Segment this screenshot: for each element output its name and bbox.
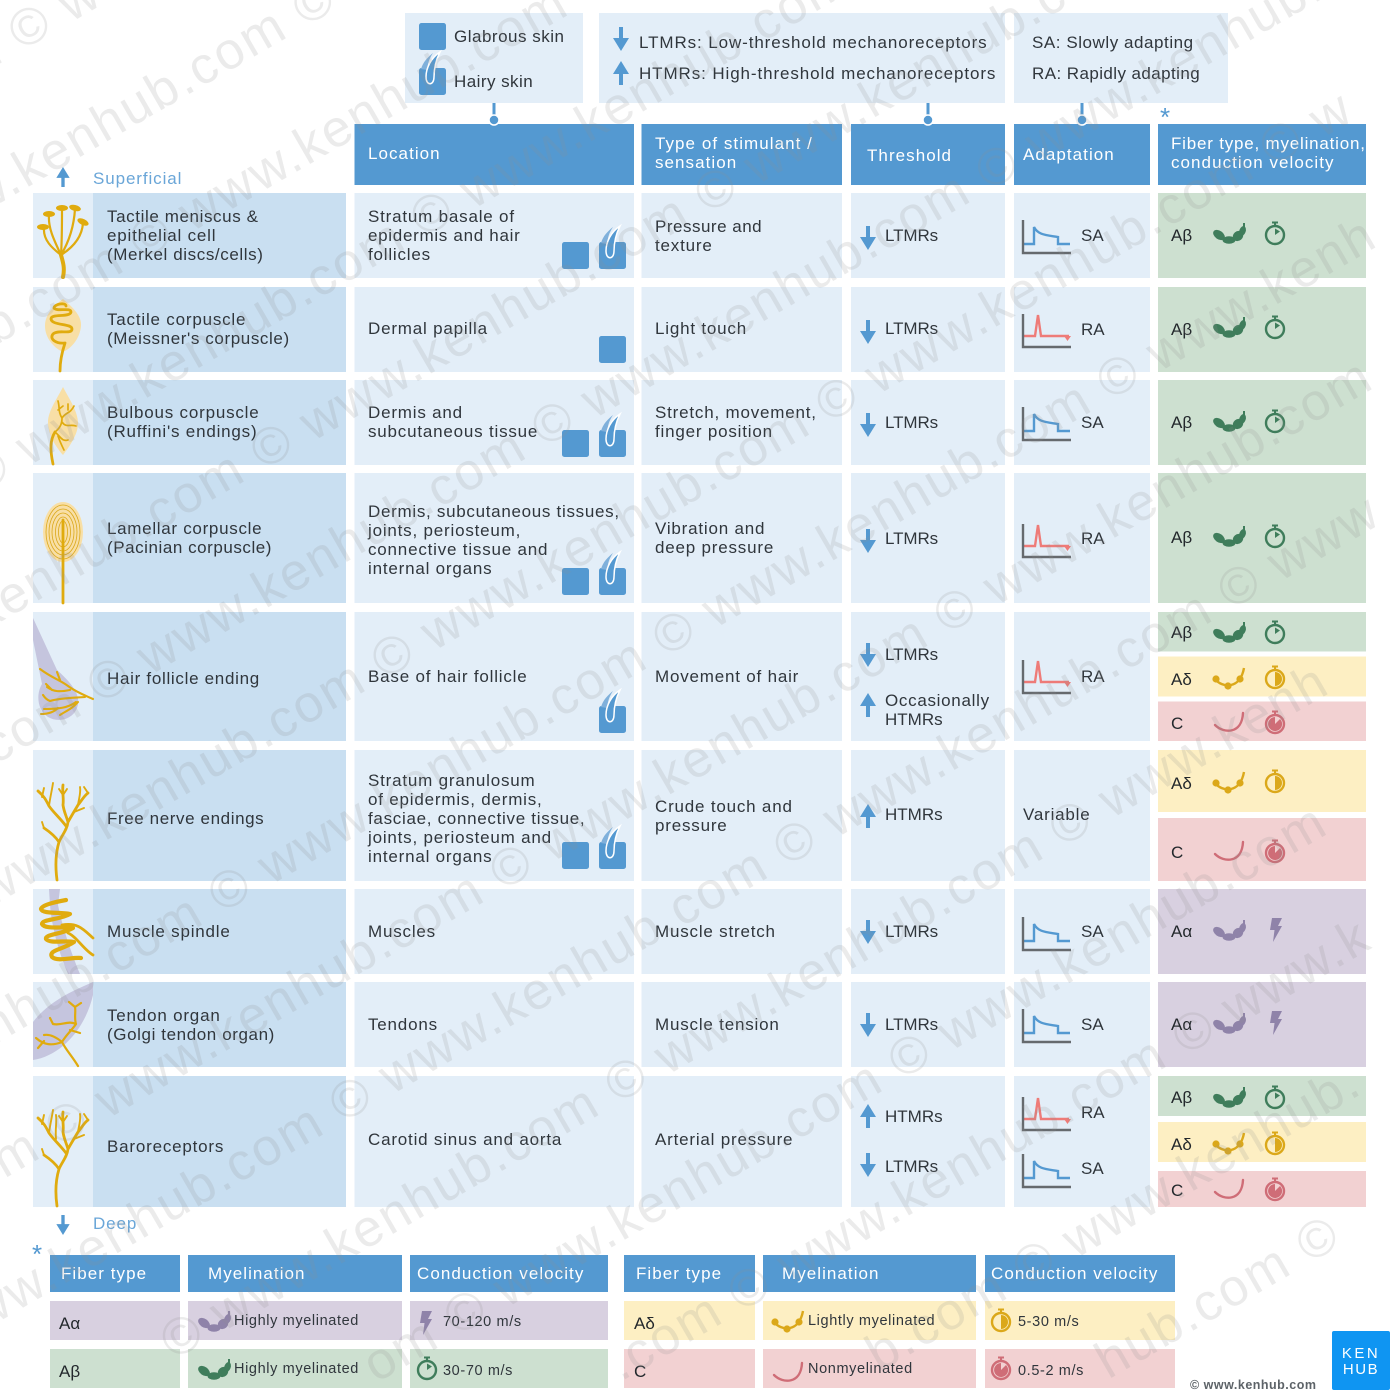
key row: A-alpha: Aα — [59, 1314, 80, 1333]
panel: fiber A-alpha — [1158, 889, 1366, 974]
key table: A-delta and C — [624, 1255, 1175, 1388]
panel: location — [354, 889, 634, 974]
panel: adaptation — [1014, 982, 1150, 1067]
receptor name: Free nerve endings — [107, 809, 264, 828]
legend label: LTMRs: LTMRs: Low-threshold mechanoreceptors — [639, 33, 988, 52]
panel: adaptation — [1014, 287, 1150, 372]
connector: threshold legend to threshold — [923, 103, 933, 125]
icon: hair follicle ending — [33, 618, 93, 720]
panel: location: Carotid sinus and aorta — [368, 1130, 562, 1149]
icon: muscle spindle — [41, 889, 93, 974]
panel: location: connective tissue and — [368, 540, 548, 559]
row: Baroreceptors — [33, 1076, 1366, 1207]
panel: stimulant — [642, 1076, 842, 1207]
panel: location: fasciae, connective tissue, — [368, 809, 585, 828]
panel: stimulant: Arterial pressure — [655, 1130, 793, 1149]
copyright: © www.kenhub.com — [1190, 1378, 1316, 1392]
panel: adaptation: SA — [1081, 226, 1104, 245]
key header: fiber type — [624, 1255, 755, 1292]
panel: adaptation — [1014, 889, 1150, 974]
key row: A-beta — [50, 1349, 608, 1388]
panel: adaptation: SA — [1081, 1159, 1104, 1178]
panel: fiber A-alpha — [1158, 982, 1366, 1067]
asterisk: fiber header: * — [1160, 102, 1170, 132]
receptor name: Baroreceptors — [107, 1137, 224, 1156]
panel: threshold: HTMRs — [885, 710, 943, 729]
icon: hairy skin — [419, 52, 446, 95]
panel: location: Base of hair follicle — [368, 667, 527, 686]
key header: fiber type: Fiber type — [61, 1264, 147, 1283]
legend: threshold — [599, 13, 1005, 103]
receptor name: Tactile corpuscle — [107, 310, 246, 329]
header: fiber type — [1158, 124, 1366, 185]
key row: A-delta — [624, 1301, 1175, 1340]
receptor name: Lamellar corpuscle — [107, 519, 262, 538]
header: type of stimulant: sensation — [655, 153, 737, 172]
watermark: .com © www.kenhub.com © www.k — [598, 907, 1381, 1392]
key table: A-alpha and A-beta — [50, 1255, 608, 1388]
row: Merkel discs: epithelial cell — [107, 226, 216, 245]
panel: stimulant: Vibration and — [655, 519, 765, 538]
header: location: Location — [368, 144, 441, 163]
header: threshold — [851, 124, 1005, 185]
panel: stimulant — [642, 380, 842, 465]
row: Ruffini — [33, 380, 1366, 465]
panel: stimulant — [642, 473, 842, 603]
legend label: rapidly adapting: RA: Rapidly adapting — [1032, 64, 1200, 83]
panel: location — [354, 473, 634, 603]
logo: Kenhub: KEN — [1342, 1345, 1380, 1362]
connector: adaptation legend to adaptation — [1077, 103, 1087, 125]
panel: threshold: LTMRs — [885, 1157, 938, 1176]
panel: fiber A-alpha: Aα — [1171, 1015, 1192, 1034]
panel: fiber A-beta, A-delta, C: C — [1171, 714, 1183, 733]
key row: C: Nonmyelinated — [808, 1361, 913, 1377]
row: Pacinian: (Pacinian corpuscle) — [107, 538, 272, 557]
panel: adaptation: RA — [1081, 320, 1105, 339]
panel: stimulant — [642, 982, 842, 1067]
panel: location: internal organs — [368, 847, 492, 866]
panel: fiber: Aβ — [1171, 226, 1192, 245]
panel: fiber A-beta, A-delta, C: Aβ — [1171, 623, 1192, 642]
row: Meissner — [33, 287, 1366, 372]
row: Muscle spindle — [33, 889, 1366, 974]
icon: glabrous skin — [419, 23, 446, 50]
panel: stimulant: finger position — [655, 422, 773, 441]
key row: A-beta: 30-70 m/s — [443, 1363, 513, 1379]
panel: stimulant: Muscle tension — [655, 1015, 780, 1034]
row: Golgi tendon organ — [33, 982, 1366, 1067]
panel: location: Stratum basale of — [368, 207, 515, 226]
panel: adaptation: RA — [1081, 667, 1105, 686]
row: Pacinian — [33, 473, 1366, 603]
key header: conduction velocity — [985, 1255, 1175, 1292]
panel: stimulant — [642, 750, 842, 881]
watermark: om © www.kenhub.com © www.kenhub.com — [353, 792, 1337, 1394]
row: Merkel discs: (Merkel discs/cells) — [107, 245, 264, 264]
panel: threshold — [851, 612, 1005, 741]
panel: threshold — [851, 473, 1005, 603]
key header: fiber type: Fiber type — [636, 1264, 722, 1283]
label: deep direction — [56, 1214, 137, 1235]
panel: fiber A-delta, C: C — [1171, 843, 1183, 862]
panel: location: Dermis, subcutaneous tissues, — [368, 502, 620, 521]
panel: location: of epidermis, dermis, — [368, 790, 543, 809]
panel: stimulant — [642, 889, 842, 974]
panel: location: Dermis and — [368, 403, 463, 422]
header: threshold: Threshold — [867, 146, 952, 165]
panel: threshold: LTMRs — [885, 226, 938, 245]
panel: stimulant: Light touch — [655, 319, 747, 338]
key row: C: C — [634, 1362, 646, 1381]
watermark: © www.kenhub.com © www.kenhub.com © www.kenh — [151, 652, 1338, 1371]
key row: C — [624, 1349, 1175, 1388]
row: Merkel discs — [33, 193, 1366, 278]
key row: C: 0.5-2 m/s — [1018, 1363, 1084, 1379]
header row — [354, 124, 1366, 185]
icon: baroreceptor — [38, 1110, 88, 1206]
panel: fiber A-beta, A-delta, C — [1158, 612, 1366, 741]
key row: A-alpha: Highly myelinated — [234, 1313, 359, 1329]
key header: myelination — [763, 1255, 976, 1292]
panel: adaptation — [1014, 612, 1150, 741]
panel: fiber A-beta, A-delta, C: Aδ — [1171, 670, 1192, 689]
asterisk: fiber key: * — [32, 1239, 42, 1269]
panel: stimulant: Crude touch and — [655, 797, 793, 816]
panel: threshold: LTMRs — [885, 319, 938, 338]
panel: stimulant: texture — [655, 236, 713, 255]
watermark: hub.com © — [1085, 1204, 1350, 1390]
panel: threshold — [851, 380, 1005, 465]
panel: adaptation: RA — [1081, 529, 1105, 548]
panel: location — [354, 193, 634, 278]
header: fiber type: Fiber type, myelination, — [1171, 134, 1366, 153]
row: Hair follicle — [33, 612, 1366, 741]
panel: threshold: LTMRs — [885, 1015, 938, 1034]
header: adaptation: Adaptation — [1023, 145, 1115, 164]
panel: adaptation: SA — [1081, 413, 1104, 432]
panel: stimulant: Stretch, movement, — [655, 403, 817, 422]
header: type of stimulant: Type of stimulant / — [655, 134, 813, 153]
key row: A-delta: Lightly myelinated — [808, 1313, 935, 1329]
panel: location: epidermis and hair — [368, 226, 520, 245]
key row: A-alpha — [50, 1301, 608, 1340]
icon: down arrow — [613, 27, 629, 51]
panel: stimulant: deep pressure — [655, 538, 774, 557]
header: fiber type: conduction velocity — [1171, 153, 1335, 172]
key header: conduction velocity — [410, 1255, 608, 1292]
key header: myelination — [188, 1255, 402, 1292]
key row: A-beta: Aβ — [59, 1362, 80, 1381]
panel: threshold — [851, 982, 1005, 1067]
panel: adaptation — [1014, 473, 1150, 603]
icon: Pacinian corpuscle — [43, 502, 83, 603]
watermark: b.com © www.kenhub. — [856, 1052, 1371, 1383]
panel: stimulant: Movement of hair — [655, 667, 799, 686]
panel: fiber — [1158, 193, 1366, 278]
receptor name: Tactile meniscus & — [107, 207, 259, 226]
panel: threshold: LTMRs — [885, 922, 938, 941]
panel: fiber A-beta, A-delta, C: Aδ — [1171, 1135, 1192, 1154]
panel: threshold — [851, 750, 1005, 881]
connector: skin legend to location — [489, 103, 499, 125]
panel: fiber — [1158, 380, 1366, 465]
panel: threshold — [851, 889, 1005, 974]
panel: fiber A-alpha: Aα — [1171, 922, 1192, 941]
header: type of stimulant — [642, 124, 842, 185]
legend label: slowly adapting: SA: Slowly adapting — [1032, 33, 1194, 52]
panel: stimulant — [642, 612, 842, 741]
panel: threshold: LTMRs — [885, 413, 938, 432]
panel: location: Tendons — [368, 1015, 438, 1034]
panel: threshold: HTMRs — [885, 1107, 943, 1126]
panel: adaptation — [1014, 1076, 1150, 1207]
legend: adaptation — [1014, 13, 1228, 103]
icon: Merkel nerve ending — [37, 204, 90, 277]
panel: location — [354, 287, 634, 372]
panel: stimulant — [642, 287, 842, 372]
row: Meissner: (Meissner's corpuscle) — [107, 329, 290, 348]
panel: location: joints, periosteum and — [367, 828, 552, 847]
panel: adaptation: Variable — [1023, 805, 1091, 824]
label: superficial direction — [56, 167, 182, 188]
panel: threshold: Occasionally — [885, 691, 990, 710]
panel: fiber A-delta, C: Aδ — [1171, 774, 1192, 793]
row: Ruffini: (Ruffini's endings) — [107, 422, 257, 441]
panel: location — [354, 1076, 634, 1207]
icon: up arrow — [613, 61, 629, 85]
header: adaptation — [1014, 124, 1150, 185]
key header: myelination: Myelination — [208, 1264, 306, 1283]
panel: stimulant — [642, 193, 842, 278]
row: Free nerve endings — [33, 750, 1366, 881]
panel: stimulant: Muscle stretch — [655, 922, 776, 941]
panel: threshold — [851, 1076, 1005, 1207]
panel: location: follicles — [368, 245, 431, 264]
panel: fiber: Aβ — [1171, 320, 1192, 339]
panel: threshold: LTMRs — [885, 645, 938, 664]
panel: threshold: LTMRs — [885, 529, 938, 548]
legend: skin types — [405, 13, 583, 103]
receptor name: Tendon organ — [107, 1006, 221, 1025]
label: deep direction: Deep — [93, 1214, 137, 1233]
panel: adaptation — [1014, 750, 1150, 881]
key row: A-beta: Highly myelinated — [234, 1361, 359, 1377]
key header: myelination: Myelination — [782, 1264, 880, 1283]
panel: fiber — [1158, 287, 1366, 372]
logo: Kenhub: HUB — [1343, 1361, 1379, 1378]
panel: fiber A-delta, C — [1158, 750, 1366, 881]
legend label: hairy skin: Hairy skin — [454, 72, 533, 91]
key header: conduction velocity: Conduction velocity — [991, 1264, 1158, 1283]
legend label: glabrous skin: Glabrous skin — [454, 27, 564, 46]
panel: location: Stratum granulosum — [368, 771, 535, 790]
watermark: www.kenhub.com © www.kenhub.com © www.kenhub.com © w — [0, 79, 1363, 919]
key row: A-delta: 5-30 m/s — [1018, 1314, 1079, 1330]
key row: A-delta: Aδ — [634, 1314, 655, 1333]
panel: location: joints, periosteum, — [367, 521, 521, 540]
key row: A-alpha: 70-120 m/s — [443, 1314, 522, 1330]
panel: adaptation: SA — [1081, 922, 1104, 941]
row: Golgi tendon organ: (Golgi tendon organ) — [107, 1025, 275, 1044]
key header: fiber type — [50, 1255, 180, 1292]
panel: stimulant: Pressure and — [655, 217, 762, 236]
panel: fiber: Aβ — [1171, 413, 1192, 432]
panel: adaptation — [1014, 380, 1150, 465]
panel: location — [354, 380, 634, 465]
panel: location — [354, 750, 634, 881]
panel: fiber: Aβ — [1171, 528, 1192, 547]
header: location — [354, 124, 634, 185]
receptor name: Hair follicle ending — [107, 669, 260, 688]
panel: location: Dermal papilla — [368, 319, 488, 338]
panel: threshold — [851, 287, 1005, 372]
key header: conduction velocity: Conduction velocity — [417, 1264, 584, 1283]
panel: adaptation: SA — [1081, 1015, 1104, 1034]
label: superficial direction: Superficial — [93, 169, 182, 188]
receptor name: Bulbous corpuscle — [107, 403, 260, 422]
panel: location — [354, 982, 634, 1067]
logo: Kenhub — [1332, 1331, 1390, 1390]
panel: fiber A-beta, A-delta, C — [1158, 1076, 1366, 1207]
panel: fiber A-beta, A-delta, C: C — [1171, 1181, 1183, 1200]
panel: location: internal organs — [368, 559, 492, 578]
panel: threshold — [851, 193, 1005, 278]
panel: stimulant: pressure — [655, 816, 728, 835]
icon: Golgi tendon organ — [33, 982, 93, 1066]
icon: Meissner corpuscle — [45, 299, 81, 371]
legend label: HTMRs: HTMRs: High-threshold mechanoreceptors — [639, 64, 996, 83]
panel: fiber A-beta, A-delta, C: Aβ — [1171, 1088, 1192, 1107]
panel: location: Muscles — [368, 922, 436, 941]
receptor name: Muscle spindle — [107, 922, 231, 941]
panel: adaptation — [1014, 193, 1150, 278]
panel: threshold: HTMRs — [885, 805, 943, 824]
panel: fiber — [1158, 473, 1366, 603]
panel: location — [354, 612, 634, 741]
panel: location: subcutaneous tissue — [368, 422, 538, 441]
icon: Ruffini ending — [48, 387, 78, 464]
panel: adaptation: RA — [1081, 1103, 1105, 1122]
icon: free nerve ending — [38, 783, 88, 880]
